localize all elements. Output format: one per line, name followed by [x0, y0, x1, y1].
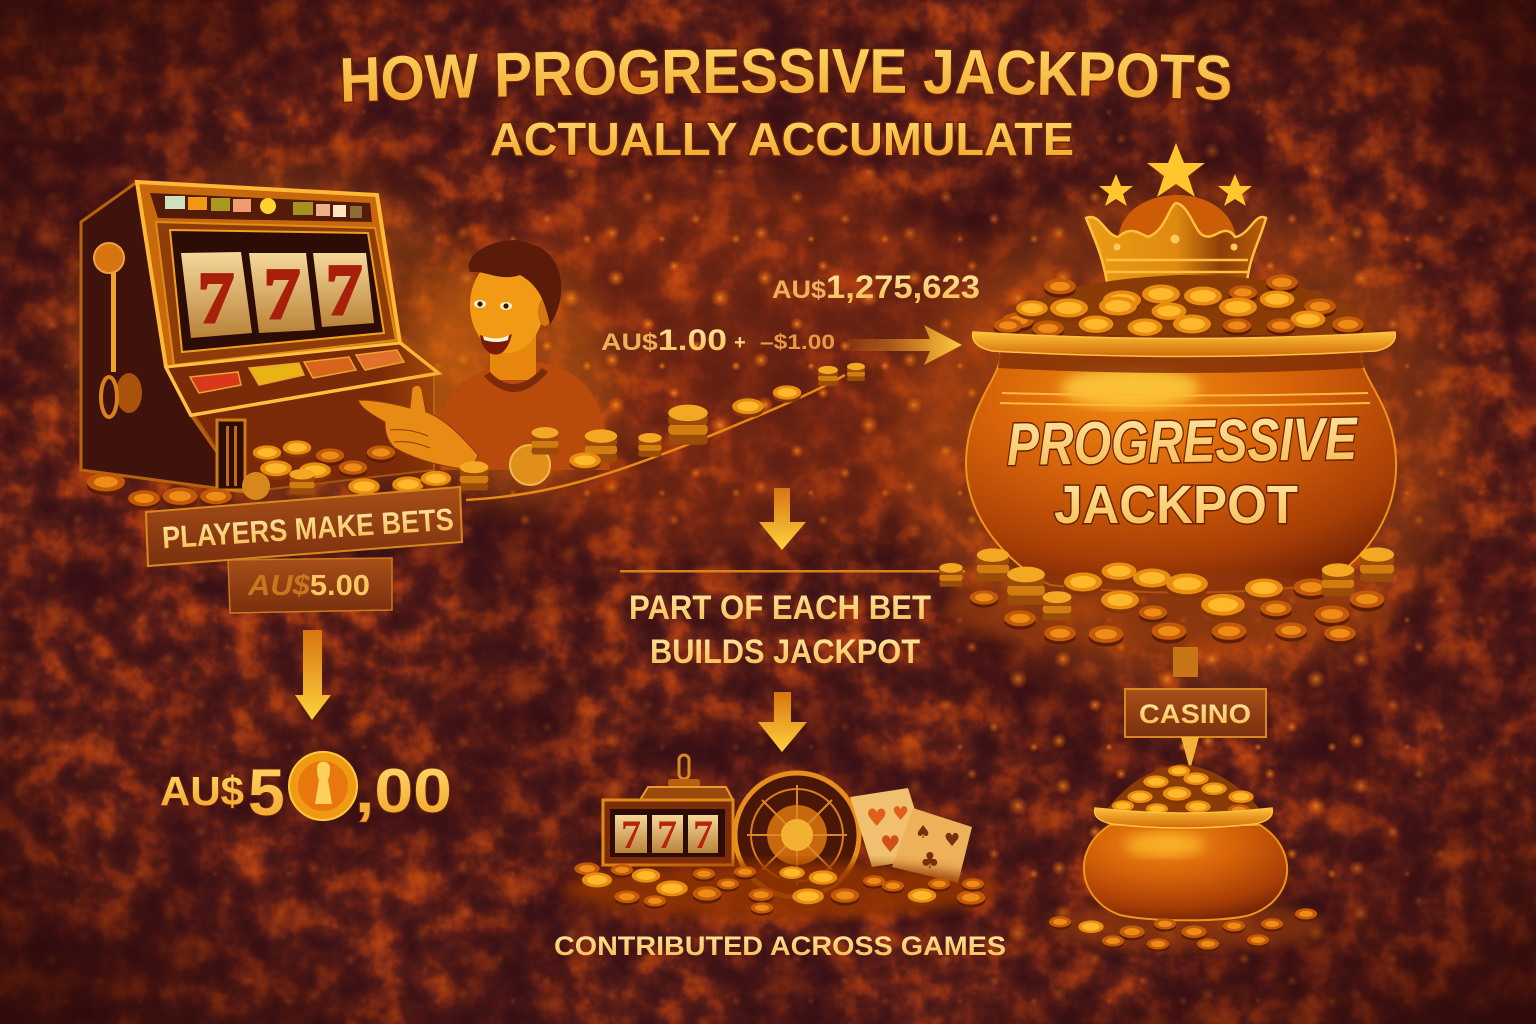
casino sign	[1125, 689, 1266, 737]
title	[342, 47, 1232, 165]
mini slot machine: 7	[657, 812, 677, 857]
mini slot machine: 7	[621, 812, 641, 857]
buttons	[190, 350, 404, 393]
crown	[1086, 195, 1266, 282]
slot machine	[70, 170, 490, 510]
indicator lights	[165, 196, 362, 218]
playing cards: ♥	[880, 832, 901, 858]
playing cards: ♥	[892, 803, 909, 825]
playing cards: ♥	[944, 830, 960, 851]
games group	[565, 755, 995, 918]
title: HOW PROGRESSIVE JACKPOTS	[342, 47, 1232, 104]
reels 777: 7	[264, 254, 300, 334]
big jackpot pot	[966, 143, 1396, 592]
small pot	[1045, 764, 1325, 952]
plaque: players make bets: PLAYERS MAKE BETS	[161, 502, 455, 555]
amount: AU$5,00 with coin	[160, 753, 452, 829]
title: ACTUALLY ACCUMULATE	[490, 113, 1074, 165]
plaque: players make bets: AU$5.00	[247, 570, 370, 602]
coin trail	[87, 363, 865, 510]
playing cards: ♠	[915, 822, 931, 843]
contribution amount	[601, 324, 835, 357]
contribution amount: AU$ 1.00	[601, 324, 727, 357]
arrow: down to games	[758, 692, 807, 752]
reels 777: 7	[198, 258, 234, 338]
player	[358, 240, 615, 500]
amount: AU$5,00 with coin: 5	[248, 755, 285, 829]
amount: AU$5,00 with coin: ,00	[355, 757, 452, 826]
mini slot machine: 7	[693, 812, 713, 857]
jackpot total: AU$1,275,623	[772, 269, 980, 305]
coin heap	[993, 274, 1376, 340]
pot rim	[973, 332, 1395, 356]
pointing hand	[358, 385, 478, 470]
text: part of each bet builds jackpot	[629, 589, 931, 671]
playing cards	[850, 788, 972, 883]
arrow: bet down to amount	[295, 630, 331, 720]
contribution amount: +	[734, 332, 746, 354]
connector post	[1173, 647, 1198, 677]
amount: AU$5,00 with coin: AU$	[160, 768, 244, 814]
divider line	[620, 570, 965, 572]
pot highlight	[1060, 368, 1200, 408]
playing cards: ♣	[920, 849, 940, 874]
pot label: PROGRESSIVE	[1006, 405, 1359, 478]
pot label: JACKPOT	[1054, 475, 1298, 535]
arrow: to jackpot pot	[848, 325, 962, 365]
caption: contributed across games: CONTRIBUTED ACROSS GAMES	[554, 931, 1006, 961]
mini slot machine	[603, 755, 733, 865]
coin bed	[565, 862, 995, 918]
arrow: down to part of each bet	[759, 488, 806, 550]
stars	[1099, 143, 1252, 206]
casino sign: CASINO	[1139, 699, 1251, 729]
text: part of each bet builds jackpot: PART OF EACH BET	[629, 589, 931, 627]
pot body	[966, 350, 1396, 592]
coin vent	[217, 420, 245, 490]
arrow: casino to small pot	[1181, 737, 1199, 770]
reels 777	[181, 250, 374, 338]
reels 777: 7	[326, 250, 362, 330]
plaque: players make bets	[146, 487, 462, 613]
playing cards: ♥	[866, 804, 888, 832]
contribution amount: –$1.00	[760, 331, 835, 354]
roulette wheel	[735, 773, 859, 897]
text: part of each bet builds jackpot: BUILDS JACKPOT	[650, 633, 920, 671]
lever	[94, 243, 142, 417]
coin pile under pot	[939, 547, 1395, 648]
pot label	[1006, 405, 1359, 535]
